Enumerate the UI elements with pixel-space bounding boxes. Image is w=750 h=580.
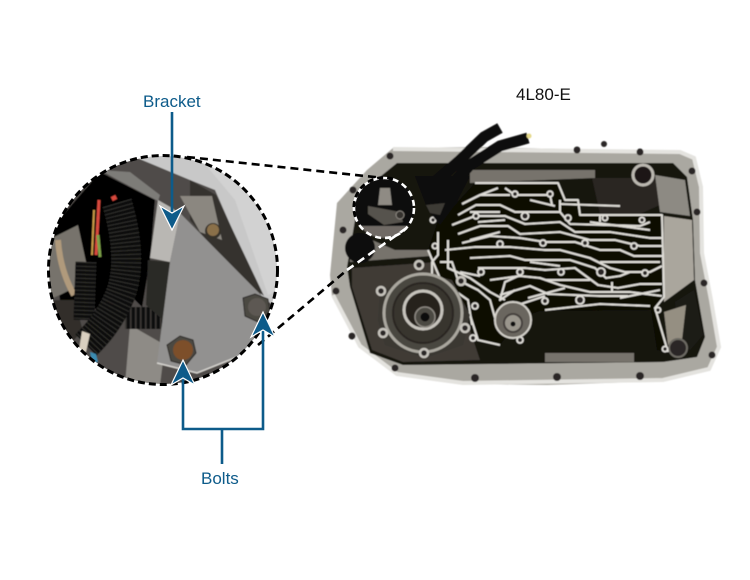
inset bolt right — [243, 294, 270, 322]
right floor area — [664, 216, 694, 302]
label: Bracket: Bracket — [143, 92, 201, 111]
left floor — [352, 262, 480, 362]
inset bracket flange — [150, 200, 180, 262]
large servo bore — [377, 261, 470, 358]
inset stud — [205, 223, 221, 239]
infographic: 4L80-E valve body bracket bolts — [47, 88, 722, 484]
inset dark housing and wiring cavity — [54, 174, 156, 310]
label: Bolts: Bolts — [201, 469, 239, 488]
casting flange — [330, 147, 720, 385]
inner cavity — [347, 163, 705, 365]
round hole — [345, 233, 375, 263]
inset small conduit — [84, 262, 86, 320]
arrows: Bolts pointers — [171, 312, 275, 464]
bottom band — [545, 353, 634, 362]
inset left tube — [49, 224, 87, 298]
round boss — [669, 339, 687, 357]
photo: transmission case with valve body — [330, 128, 720, 385]
dashed leader lines — [187, 157, 408, 345]
inset bracket plate — [157, 213, 270, 373]
title: 4L80-E: 4L80-E — [516, 85, 571, 104]
plate channels — [428, 183, 668, 352]
dashed ring: close-up — [48, 156, 278, 384]
inset main conduit — [86, 203, 126, 345]
small circle: bracket location — [355, 179, 414, 239]
separator plate — [428, 183, 668, 352]
inset spring — [125, 307, 165, 329]
arrow: Bracket pointer — [160, 112, 184, 230]
top band — [470, 170, 595, 183]
inset light housing — [138, 156, 275, 304]
plate bolt rings — [430, 191, 668, 352]
inset window — [146, 260, 170, 320]
dashed ring: detail location — [354, 178, 414, 238]
inset bottom metal — [74, 299, 142, 344]
inset wire ends — [79, 331, 90, 352]
flange bolt holes — [332, 141, 716, 382]
inset wires — [96, 200, 99, 255]
inset circle: bracket close-up — [48, 155, 280, 387]
inset bolt bottom — [167, 336, 196, 365]
small servo bore — [495, 302, 531, 338]
wire connectors — [437, 128, 500, 180]
plug — [633, 165, 653, 185]
